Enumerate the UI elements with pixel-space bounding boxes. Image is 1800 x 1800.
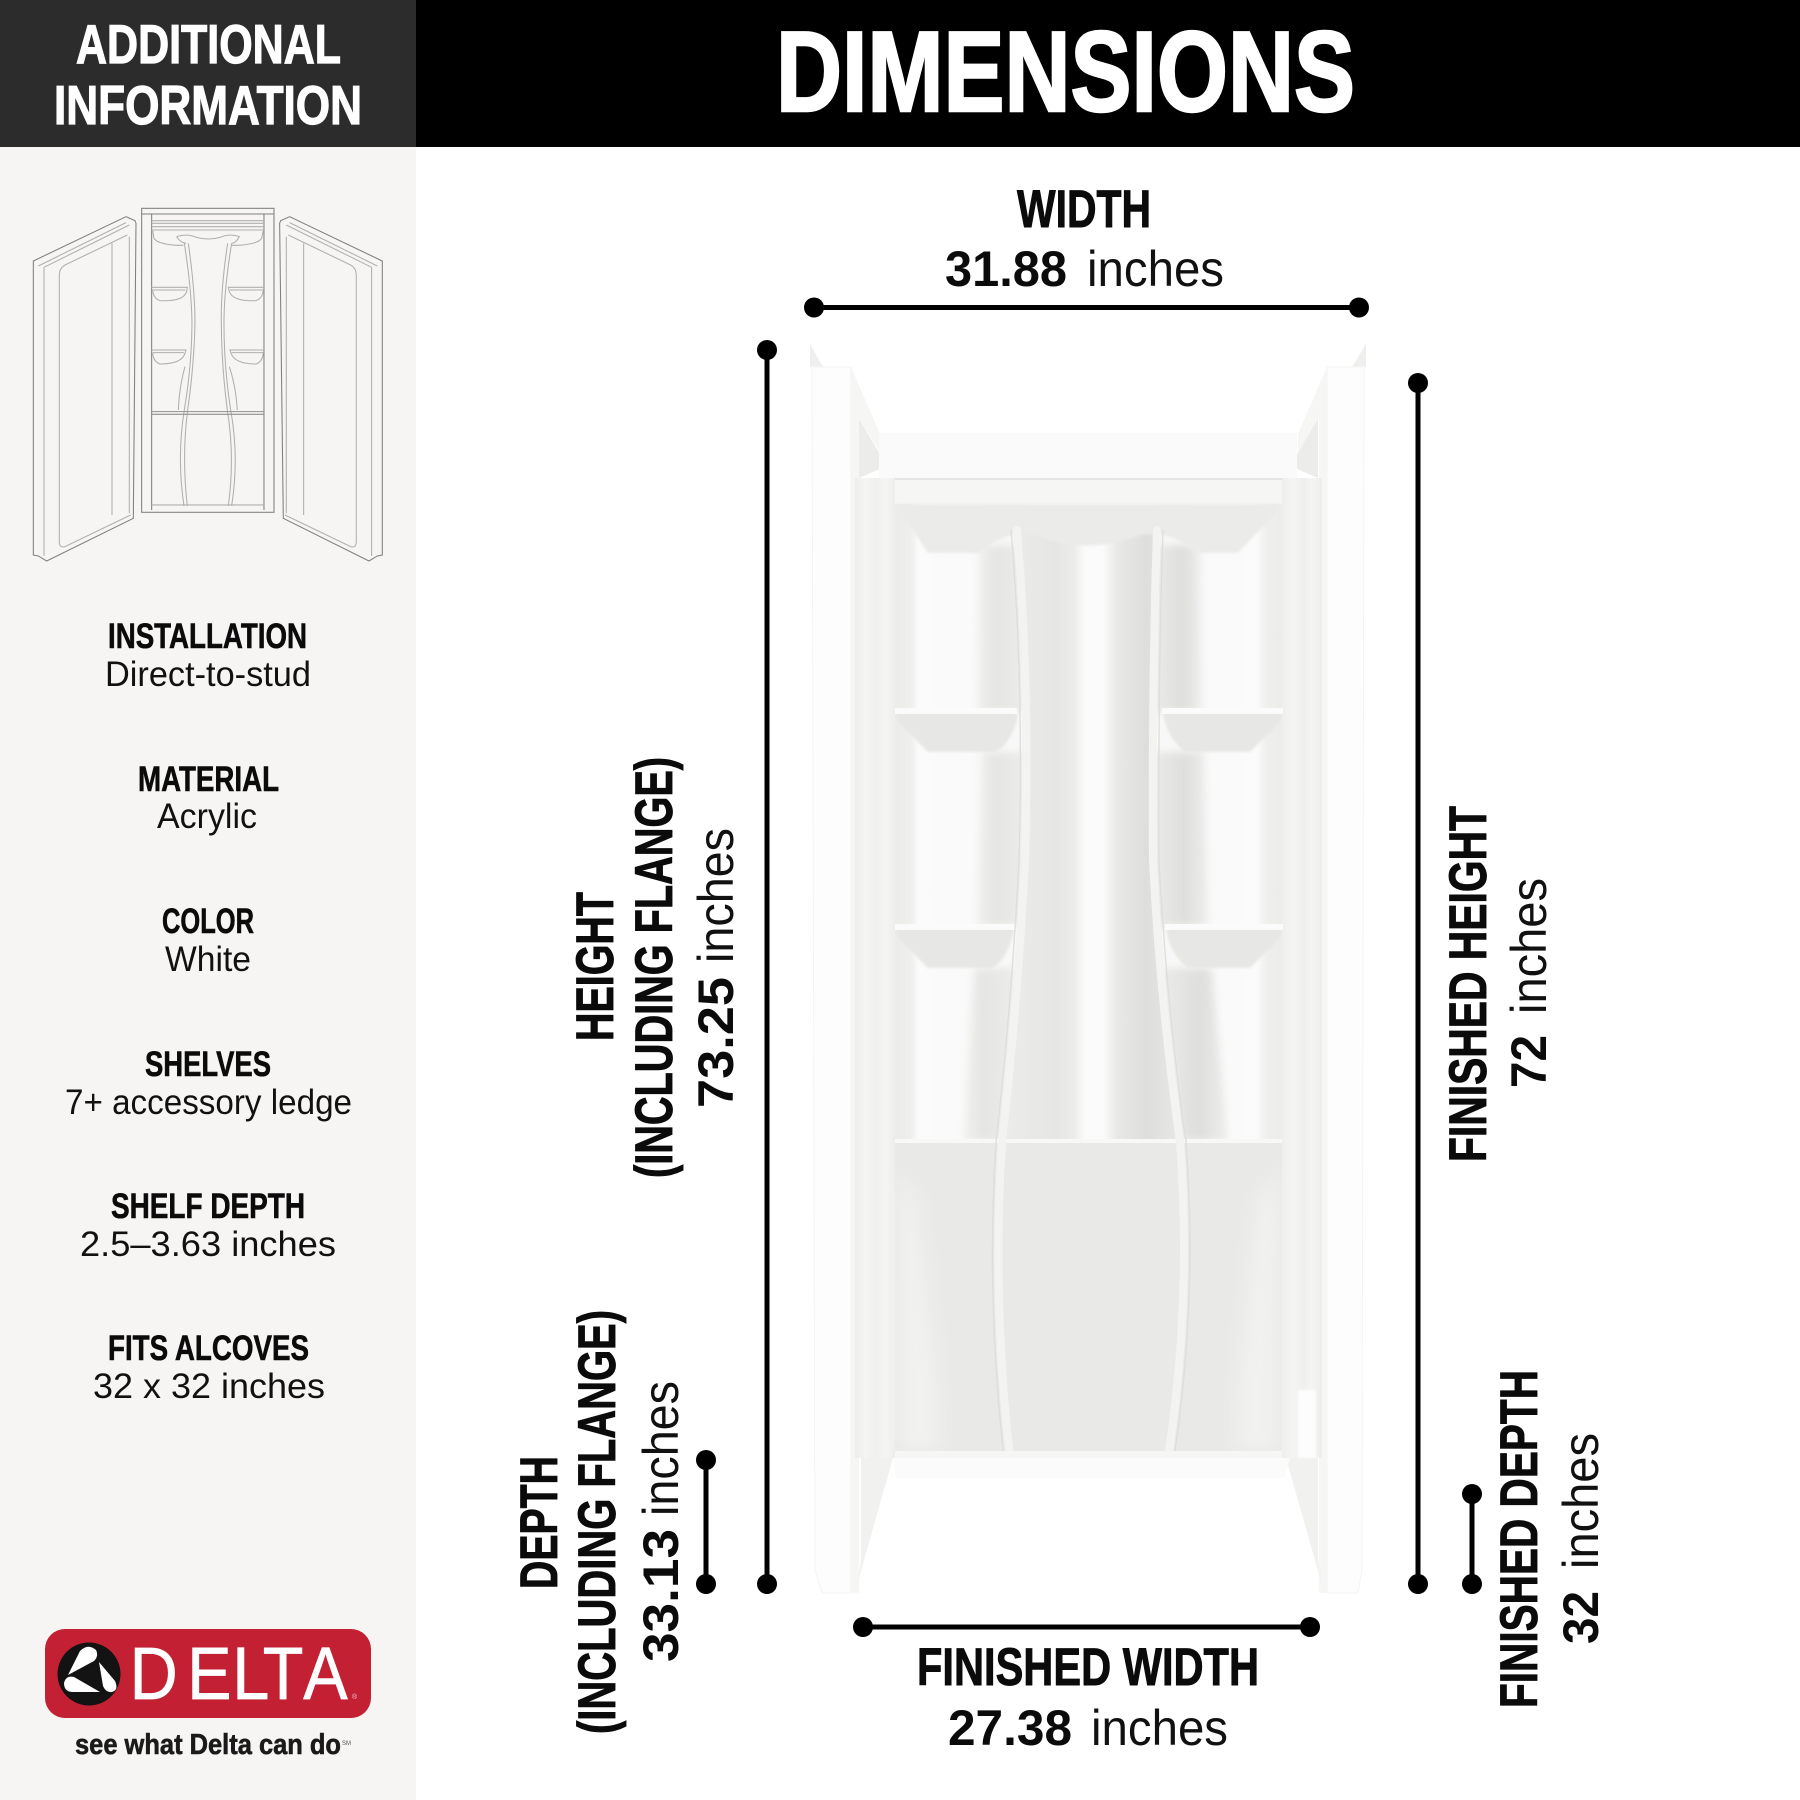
dimension: width	[804, 180, 1369, 318]
text block: fits alcoves: FITS ALCOVES	[108, 1329, 309, 1368]
dimension: finished height: 72	[1501, 1035, 1557, 1088]
text block: shelves: 7+ accessory ledge	[65, 1083, 352, 1122]
sidebar heading: INFORMATION	[54, 74, 362, 136]
dimension: finished width: inches	[1091, 1700, 1228, 1756]
text block: shelf depth: SHELF DEPTH	[111, 1187, 305, 1226]
right stile and flange	[1298, 344, 1366, 1593]
text block: fits alcoves	[93, 1329, 325, 1406]
lower back wall panels	[895, 1139, 1282, 1457]
dimension: finished height	[1408, 373, 1557, 1594]
text block: color: White	[165, 940, 251, 979]
dimension: width: inches	[1087, 241, 1224, 297]
dimension: width: WIDTH	[1017, 180, 1151, 239]
text block: shelf depth: 2.5–3.63 inches	[80, 1225, 336, 1264]
dimension: height including flange: inches	[688, 828, 744, 963]
text block: color	[162, 902, 254, 979]
text block: material	[138, 760, 279, 836]
dimension: finished width: 27.38	[948, 1700, 1072, 1756]
logo: Delta	[45, 1629, 371, 1761]
dimension: finished width: FINISHED WIDTH	[917, 1638, 1259, 1697]
shelves	[895, 708, 1283, 968]
text block: installation: INSTALLATION	[108, 617, 307, 656]
dimension: finished height: inches	[1501, 878, 1557, 1014]
logo: Delta: ®	[352, 1693, 358, 1701]
text block: installation	[105, 617, 311, 694]
dimension: height including flange: 73.25	[688, 977, 744, 1108]
side walls	[855, 419, 1322, 1585]
icon: Delta triangular emblem	[58, 1642, 120, 1706]
text block: material: MATERIAL	[138, 760, 279, 799]
header banner	[416, 0, 1800, 147]
sidebar heading: ADDITIONAL	[76, 13, 341, 75]
right wall panel	[280, 217, 382, 561]
logo: Delta: see what Delta can do	[75, 1729, 341, 1761]
recess shading wedges	[964, 545, 1228, 1141]
panel: additional information sidebar	[0, 0, 416, 1800]
text block: installation: Direct-to-stud	[105, 655, 311, 694]
text block: shelf depth	[80, 1187, 336, 1264]
dimension: depth including flange: DEPTH	[510, 1456, 569, 1589]
shower wall product image	[810, 344, 1366, 1593]
text block: fits alcoves: 32 x 32 inches	[93, 1367, 325, 1406]
left wall panel	[33, 217, 136, 561]
dimension: depth including flange: inches	[633, 1381, 689, 1516]
dimension: height including flange: HEIGHT	[566, 892, 625, 1041]
dimension: height including flange	[566, 340, 777, 1594]
sidebar heading	[0, 0, 416, 147]
dimension: width: 31.88	[945, 241, 1067, 297]
text block: shelves	[65, 1045, 352, 1122]
text block: shelves: SHELVES	[145, 1045, 271, 1084]
dimension: depth including flange: 33.13	[633, 1529, 689, 1662]
dimension: finished width	[853, 1617, 1320, 1756]
back wall upper band	[879, 433, 1297, 504]
dimension: finished depth: 32	[1553, 1591, 1609, 1644]
back wall panel	[142, 208, 274, 512]
logo: Delta: SM	[342, 1741, 351, 1747]
lower ledge	[893, 1451, 1290, 1478]
dimension: finished depth: inches	[1553, 1433, 1609, 1569]
central column	[1002, 530, 1182, 1142]
dimension: finished depth: FINISHED DEPTH	[1490, 1370, 1549, 1708]
dimension: depth including flange	[510, 1310, 716, 1734]
dimension: finished depth	[1462, 1370, 1609, 1708]
back wall recess panels	[895, 504, 1282, 1140]
title: DIMENSIONS	[776, 9, 1355, 136]
logo: Delta: DELTA	[130, 1632, 348, 1715]
left stile and flange	[810, 344, 880, 1593]
text block: material: Acrylic	[157, 797, 257, 836]
text block: color: COLOR	[162, 902, 254, 941]
dimension: depth including flange: (INCLUDING FLANGE)	[568, 1310, 627, 1734]
icon: exploded three-panel wall line drawing	[33, 208, 382, 561]
top accessory ledge	[895, 504, 1282, 553]
curved ribs	[992, 530, 1190, 1458]
dimension: height including flange: (INCLUDING FLANGE)	[625, 757, 684, 1178]
dimension: finished height: FINISHED HEIGHT	[1439, 806, 1498, 1162]
